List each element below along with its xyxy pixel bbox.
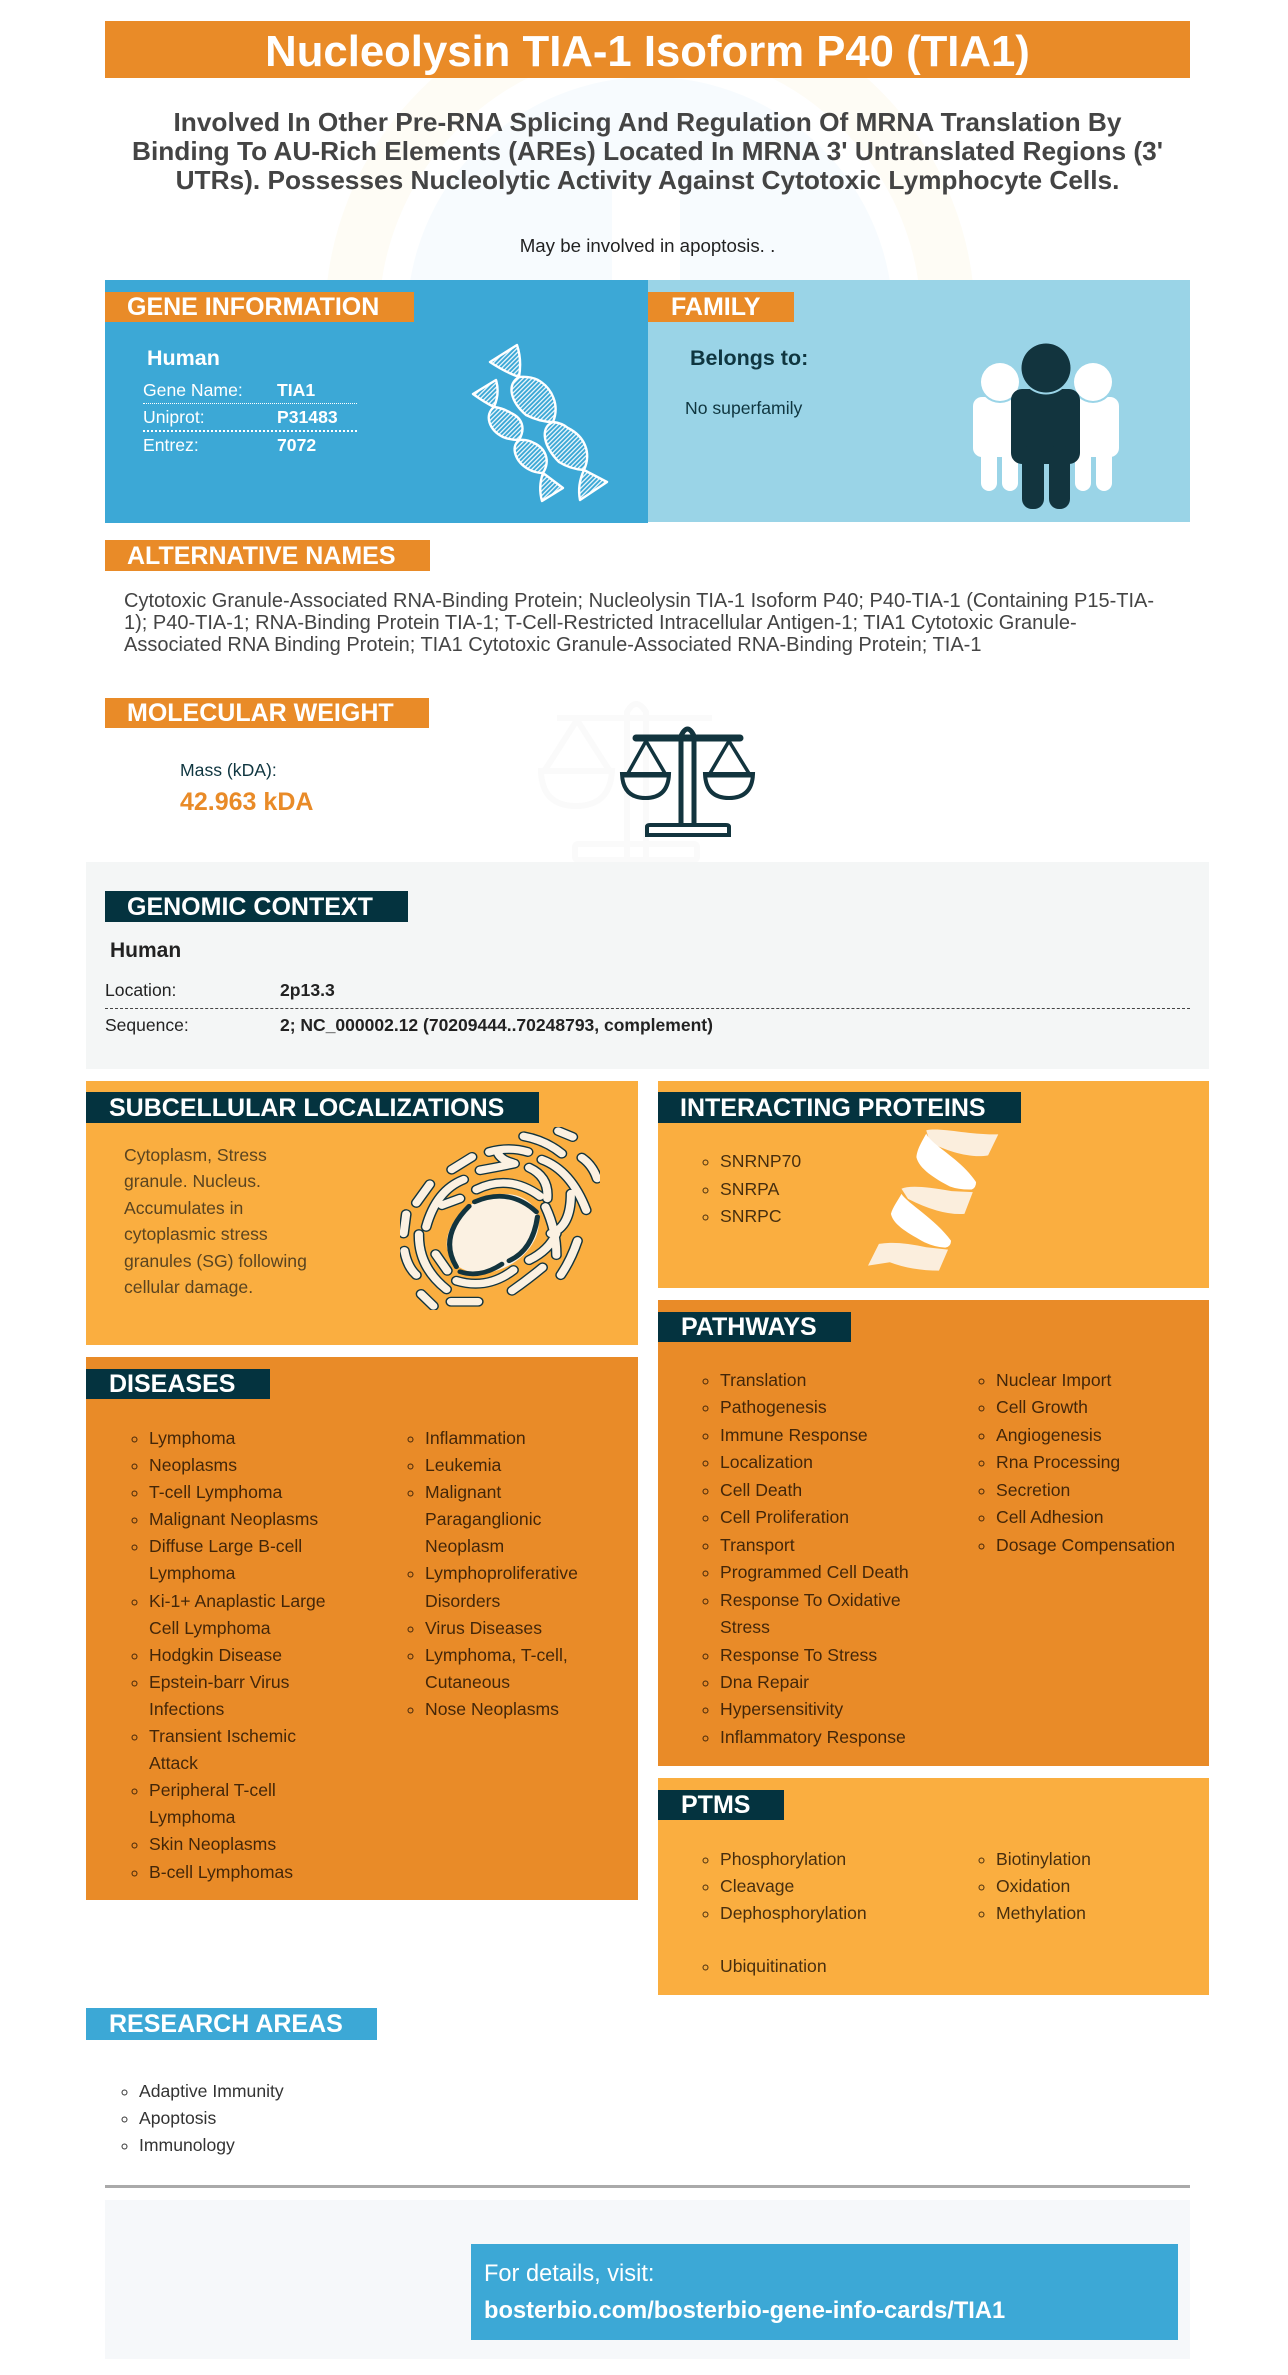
- panel: interacting proteins: [658, 1081, 1209, 1288]
- pathways list column 1: Transport: [720, 1535, 795, 1555]
- diseases list column 2: Virus Diseases: [425, 1618, 542, 1638]
- uniprot row: P31483: [277, 407, 338, 427]
- heading: alternative names: ALTERNATIVE NAMES: [127, 542, 396, 570]
- interacting proteins list: [702, 1151, 801, 1226]
- panel: footer: [105, 2200, 1190, 2359]
- research areas list: Adaptive Immunity: [139, 2081, 284, 2101]
- alternative names text: [124, 590, 1154, 656]
- diseases list column 1: Ki-1+ Anaplastic Large: [149, 1591, 326, 1611]
- diseases list column 1: Lymphoma: [149, 1428, 235, 1448]
- icon: balance scales: [620, 726, 756, 837]
- background watermark logo: [328, 78, 972, 280]
- pathways list column 2: Rna Processing: [996, 1452, 1120, 1472]
- pathways list column 2: Cell Adhesion: [996, 1507, 1104, 1527]
- diseases list column 2: Paraganglionic: [425, 1509, 541, 1529]
- location row: [105, 978, 1190, 1009]
- species label: Human: [110, 939, 181, 962]
- localization text: [124, 1145, 307, 1297]
- heading: pathways: [658, 1312, 851, 1342]
- alternative names text: Associated RNA Binding Protein; TIA1 Cytotoxic Granule-Associated RNA-Binding Protein; TIA-1: [124, 634, 981, 656]
- diseases list column 2: Inflammation: [425, 1428, 526, 1448]
- pathways list column 2: Dosage Compensation: [996, 1535, 1175, 1555]
- icon: protein ribbon: [868, 1130, 998, 1271]
- localization text: granule. Nucleus.: [124, 1171, 261, 1191]
- localization text: Cytoplasm, Stress: [124, 1145, 267, 1165]
- diseases list column 2: Leukemia: [425, 1455, 501, 1475]
- interacting proteins list: SNRNP70: [720, 1151, 801, 1171]
- callout intro text: For details, visit:: [484, 2261, 654, 2287]
- alternative names text: 1); P40-TIA-1; RNA-Binding Protein TIA-1; T-Cell-Restricted Intracellular Antigen-1; TIA1 Cytotoxic Granule-: [124, 612, 1077, 634]
- diseases list column 2: [408, 1428, 578, 1719]
- diseases list column 2: Lymphoproliferative: [425, 1563, 578, 1583]
- panel: pathways: [658, 1300, 1209, 1766]
- pathways list column 2: [978, 1370, 1175, 1555]
- interacting proteins list: SNRPC: [720, 1206, 782, 1226]
- heading: molecular weight: MOLECULAR WEIGHT: [127, 699, 394, 727]
- diseases list column 1: Infections: [149, 1699, 224, 1719]
- diseases list column 1: B-cell Lymphomas: [149, 1862, 293, 1882]
- sequence row: 2; NC_000002.12 (70209444..70248793, complement): [280, 1015, 713, 1035]
- localization text: granules (SG) following: [124, 1251, 307, 1271]
- title banner: [105, 21, 1190, 78]
- heading: family: [648, 292, 794, 322]
- research areas list: Apoptosis: [139, 2108, 216, 2128]
- heading: research areas: RESEARCH AREAS: [109, 2010, 343, 2038]
- panel: diseases: [86, 1357, 638, 1900]
- diseases list column 1: T-cell Lymphoma: [149, 1482, 282, 1502]
- panel: family: [648, 280, 1190, 522]
- pathways list column 2: Nuclear Import: [996, 1370, 1111, 1390]
- diseases list column 2: Malignant: [425, 1482, 501, 1502]
- callout: details link: [470, 2244, 1178, 2340]
- research areas list: [122, 2081, 284, 2155]
- uniprot row: [143, 405, 357, 432]
- mass label: Mass (kDA):: [180, 760, 277, 780]
- diseases list column 1: [132, 1428, 326, 1882]
- icon: people group: [973, 344, 1119, 509]
- diseases list column 1: Transient Ischemic: [149, 1726, 296, 1746]
- mass value: 42.963 kDA: [180, 788, 313, 816]
- pathways list column 1: Translation: [720, 1370, 806, 1390]
- PTMs list column 2: Biotinylation: [996, 1848, 1091, 1868]
- interacting proteins list: SNRPA: [720, 1179, 779, 1199]
- pathways list column 1: Localization: [720, 1452, 813, 1472]
- diseases list column 1: Epstein-barr Virus: [149, 1672, 289, 1692]
- pathways list column 1: Immune Response: [720, 1425, 868, 1445]
- heading: genomic context: GENOMIC CONTEXT: [127, 893, 373, 921]
- uniprot row: Uniprot:: [143, 407, 205, 427]
- diseases list column 1: Neoplasms: [149, 1455, 237, 1475]
- PTMs list column 1: [702, 1848, 867, 1976]
- pathways list column 2: Cell Growth: [996, 1397, 1088, 1417]
- callout URL: bosterbio.com/bosterbio-gene-info-cards/TIA1: [484, 2298, 1005, 2324]
- heading: PTMs: [658, 1790, 784, 1820]
- PTMs list column 2: Methylation: [996, 1903, 1086, 1923]
- heading: diseases: DISEASES: [109, 1370, 235, 1398]
- pathways list column 1: Inflammatory Response: [720, 1727, 906, 1747]
- pathways list column 1: Response To Oxidative: [720, 1590, 901, 1610]
- diseases list column 2: Cutaneous: [425, 1672, 510, 1692]
- icon: DNA helices: [472, 344, 608, 502]
- heading: gene information: GENE INFORMATION: [127, 293, 379, 321]
- sequence row: Sequence:: [105, 1015, 189, 1035]
- species label: Human: [147, 346, 220, 370]
- panel: subcellular localizations: [86, 1081, 638, 1345]
- entrez row: 7072: [277, 435, 316, 455]
- PTMs list column 1: Ubiquitination: [720, 1956, 827, 1976]
- diseases list column 2: Lymphoma, T-cell,: [425, 1645, 568, 1665]
- family value: No superfamily: [685, 398, 802, 418]
- title banner: Nucleolysin TIA-1 Isoform P40 (TIA1): [265, 27, 1030, 76]
- diseases list column 1: Attack: [149, 1753, 198, 1773]
- entrez row: [143, 435, 316, 455]
- PTMs list column 2: [978, 1848, 1091, 1923]
- research areas list: Immunology: [139, 2135, 235, 2155]
- localization text: Accumulates in: [124, 1198, 243, 1218]
- heading: interacting proteins: INTERACTING PROTEINS: [680, 1094, 986, 1122]
- pathways list column 1: Stress: [720, 1617, 770, 1637]
- subtitle: function summary: Involved In Other Pre-RNA Splicing And Regulation Of MRNA Translation By: [174, 107, 1122, 137]
- heading: pathways: PATHWAYS: [681, 1313, 817, 1341]
- diseases list column 1: Skin Neoplasms: [149, 1834, 276, 1854]
- pathways list column 1: Dna Repair: [720, 1672, 809, 1692]
- subtitle: function summary: Binding To AU-Rich Elements (AREs) Located In MRNA 3' Untranslated Regions (3': [132, 136, 1163, 166]
- diseases list column 1: Lymphoma: [149, 1807, 235, 1827]
- diseases list column 2: Disorders: [425, 1591, 500, 1611]
- diseases list column 1: Peripheral T-cell: [149, 1780, 276, 1800]
- secondary description: May be involved in apoptosis. .: [520, 235, 775, 256]
- alternative names text: Cytotoxic Granule-Associated RNA-Binding Protein; Nucleolysin TIA-1 Isoform P40; P40-TIA-1 (Containing P15-TIA-: [124, 590, 1154, 612]
- localization text: cellular damage.: [124, 1277, 253, 1297]
- heading: subcellular localizations: SUBCELLULAR LOCALIZATIONS: [109, 1094, 504, 1122]
- entrez row: Entrez:: [143, 435, 199, 455]
- pathways list column 1: Hypersensitivity: [720, 1699, 843, 1719]
- localization text: cytoplasmic stress: [124, 1224, 268, 1244]
- diseases list column 1: Diffuse Large B-cell: [149, 1536, 302, 1556]
- pathways list column 2: Secretion: [996, 1480, 1070, 1500]
- icon: faint scales watermark: [535, 700, 725, 862]
- PTMs list column 2: Oxidation: [996, 1876, 1070, 1896]
- heading: family: FAMILY: [671, 293, 760, 321]
- pathways list column 2: Angiogenesis: [996, 1425, 1102, 1445]
- belongs to label: Belongs to:: [690, 346, 808, 370]
- diseases list column 1: Lymphoma: [149, 1563, 235, 1583]
- pathways list column 1: Pathogenesis: [720, 1397, 827, 1417]
- icon: cell with organelles: [400, 1127, 600, 1310]
- panel: gene information: [105, 280, 648, 523]
- location row: 2p13.3: [280, 980, 335, 1000]
- pathways list column 1: Cell Death: [720, 1480, 802, 1500]
- pathways list column 1: Programmed Cell Death: [720, 1562, 909, 1582]
- gene name row: [143, 378, 357, 404]
- heading: PTMs: PTMS: [681, 1791, 750, 1819]
- diseases list column 1: Hodgkin Disease: [149, 1645, 282, 1665]
- diseases list column 2: Neoplasm: [425, 1536, 504, 1556]
- pathways list column 1: Cell Proliferation: [720, 1507, 849, 1527]
- gene name row: Gene Name:: [143, 380, 243, 400]
- pathways list column 1: Response To Stress: [720, 1645, 877, 1665]
- location row: Location:: [105, 980, 176, 1000]
- subtitle: function summary: UTRs). Possesses Nucleolytic Activity Against Cytotoxic Lymphocyte Cells.: [176, 165, 1119, 195]
- diseases list column 2: Nose Neoplasms: [425, 1699, 559, 1719]
- panel: genomic context: [86, 862, 1209, 1069]
- diseases list column 1: Cell Lymphoma: [149, 1618, 271, 1638]
- PTMs list column 1: Phosphorylation: [720, 1848, 846, 1868]
- panel: PTMs: [658, 1778, 1209, 1995]
- heading: diseases: [86, 1369, 270, 1399]
- subtitle: function summary: [132, 107, 1163, 195]
- PTMs list column 1: Dephosphorylation: [720, 1903, 867, 1923]
- PTMs list column 1: Cleavage: [720, 1876, 794, 1896]
- pathways list column 1: [702, 1370, 909, 1747]
- gene name row: TIA1: [277, 380, 315, 400]
- diseases list column 1: Malignant Neoplasms: [149, 1509, 318, 1529]
